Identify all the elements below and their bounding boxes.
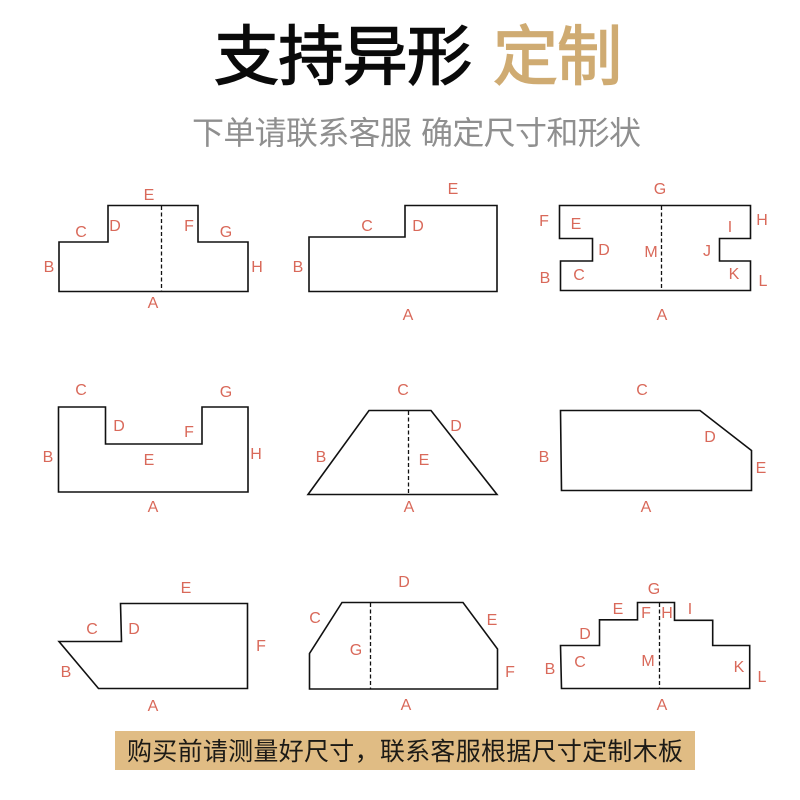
- diagram: shape 5 trapezoid: [308, 382, 497, 516]
- diagram: shape 9 stair steps: H: [661, 605, 673, 622]
- diagram: shape 3 side notches: G: [654, 181, 666, 198]
- diagram: shape 8 double chamfer: [309, 574, 515, 714]
- diagram: shape 6 chamfered corner: A: [641, 499, 652, 516]
- diagram: shape 4 U-shape: G: [220, 384, 232, 401]
- diagram: shape 3 side notches: D: [598, 242, 610, 259]
- diagram: shape 4 U-shape: A: [148, 499, 159, 516]
- diagram: shape 9 stair steps: F: [641, 605, 651, 622]
- diagram: shape 9 stair steps: A: [657, 697, 668, 714]
- diagram: shape 6 chamfered corner: E: [756, 460, 766, 477]
- diagram: shape 8 double chamfer: E: [487, 612, 497, 629]
- diagram: shape 1 stepped top: H: [251, 259, 263, 276]
- diagram: shape 2 corner notch: [293, 181, 497, 324]
- diagram: shape 6 chamfered corner: D: [704, 429, 716, 446]
- title: [214, 20, 622, 93]
- diagram: shape 2 corner notch: E: [448, 181, 458, 198]
- diagram: shape 9 stair steps: G: [648, 581, 660, 598]
- diagram: shape 9 stair steps: M: [641, 653, 655, 670]
- diagram: shape 9 stair steps: [545, 581, 767, 714]
- title: 支持异形: [214, 20, 472, 93]
- diagram: shape 9 stair steps: C: [574, 654, 586, 671]
- diagram: shape 4 U-shape: [43, 382, 262, 516]
- diagram: shape 2 corner notch: A: [403, 307, 414, 324]
- diagram: shape 5 trapezoid: B: [316, 449, 326, 466]
- diagram: shape 3 side notches: F: [539, 213, 549, 230]
- diagram: shape 7 angled notch: C: [86, 621, 98, 638]
- diagram: shape 6 chamfered corner: C: [636, 382, 648, 399]
- footer banner: [115, 731, 695, 770]
- diagram: shape 1 stepped top: F: [184, 218, 194, 235]
- diagram: shape 1 stepped top: G: [220, 224, 232, 241]
- diagram: shape 1 stepped top: [44, 187, 263, 312]
- diagram: shape 2 corner notch: C: [361, 218, 373, 235]
- diagram: shape 7 angled notch: B: [61, 664, 71, 681]
- diagram: shape 3 side notches: C: [573, 267, 585, 284]
- diagram: shape 6 chamfered corner: [539, 382, 766, 516]
- diagram: shape 3 side notches: [539, 181, 768, 324]
- diagram: shape 3 side notches: A: [657, 307, 668, 324]
- diagram: shape 2 corner notch: B: [293, 259, 303, 276]
- diagram: shape 4 U-shape: E: [144, 452, 154, 469]
- diagram: shape 8 double chamfer: G: [350, 642, 362, 659]
- diagram: shape 7 angled notch: E: [181, 580, 191, 597]
- diagram: shape 3 side notches: J: [703, 243, 711, 260]
- diagram: shape 4 U-shape: H: [250, 446, 262, 463]
- diagram: shape 4 U-shape: D: [113, 418, 125, 435]
- diagram: shape 8 double chamfer: D: [398, 574, 410, 591]
- diagram: shape 5 trapezoid: E: [419, 452, 429, 469]
- diagram: shape 7 angled notch: F: [256, 638, 266, 655]
- diagram: shape 1 stepped top: B: [44, 259, 54, 276]
- diagram: shape 3 side notches: I: [728, 219, 732, 236]
- diagram: shape 1 stepped top: C: [75, 224, 87, 241]
- subtitle: 下单请联系客服: [192, 115, 412, 151]
- diagram: shape 4 U-shape: F: [184, 424, 194, 441]
- diagram: shape 8 double chamfer: A: [401, 697, 412, 714]
- diagram: shape 1 stepped top: A: [148, 295, 159, 312]
- diagram: shape 2 corner notch: D: [412, 218, 424, 235]
- diagram: shape 1 stepped top: E: [144, 187, 154, 204]
- diagram: shape 3 side notches: M: [644, 244, 658, 261]
- diagram: shape 5 trapezoid: D: [450, 418, 462, 435]
- diagram: shape 4 U-shape: C: [75, 382, 87, 399]
- diagram: shape 7 angled notch: A: [148, 698, 159, 715]
- diagram: shape 4 U-shape: B: [43, 449, 53, 466]
- diagram: shape 6 chamfered corner: B: [539, 449, 549, 466]
- diagram: shape 8 double chamfer: C: [309, 610, 321, 627]
- diagram: shape 5 trapezoid: A: [404, 499, 415, 516]
- diagram: shape 9 stair steps: E: [613, 601, 623, 618]
- footer banner: 购买前请测量好尺寸，联系客服根据尺寸定制木板: [127, 738, 683, 766]
- diagram: shape 9 stair steps: L: [758, 669, 767, 686]
- title: 定制: [493, 20, 622, 93]
- diagram: shape 9 stair steps: D: [579, 626, 591, 643]
- diagram: shape 9 stair steps: B: [545, 661, 555, 678]
- diagram: shape 7 angled notch: D: [128, 621, 140, 638]
- diagram: shape 3 side notches: L: [759, 273, 768, 290]
- subtitle: 确定尺寸和形状: [421, 115, 641, 151]
- diagram: shape 3 side notches: K: [729, 266, 740, 283]
- diagram: shape 8 double chamfer: F: [505, 664, 515, 681]
- diagram: shape 7 angled notch: [59, 580, 266, 715]
- diagram: shape 9 stair steps: K: [734, 659, 745, 676]
- subtitle: [192, 115, 641, 151]
- diagram: shape 9 stair steps: I: [688, 601, 692, 618]
- diagram: shape 5 trapezoid: C: [397, 382, 409, 399]
- diagram: shape 3 side notches: B: [540, 270, 550, 287]
- diagram: shape 1 stepped top: D: [109, 218, 121, 235]
- diagram: shape 3 side notches: H: [756, 212, 768, 229]
- diagram: shape 3 side notches: E: [571, 216, 581, 233]
